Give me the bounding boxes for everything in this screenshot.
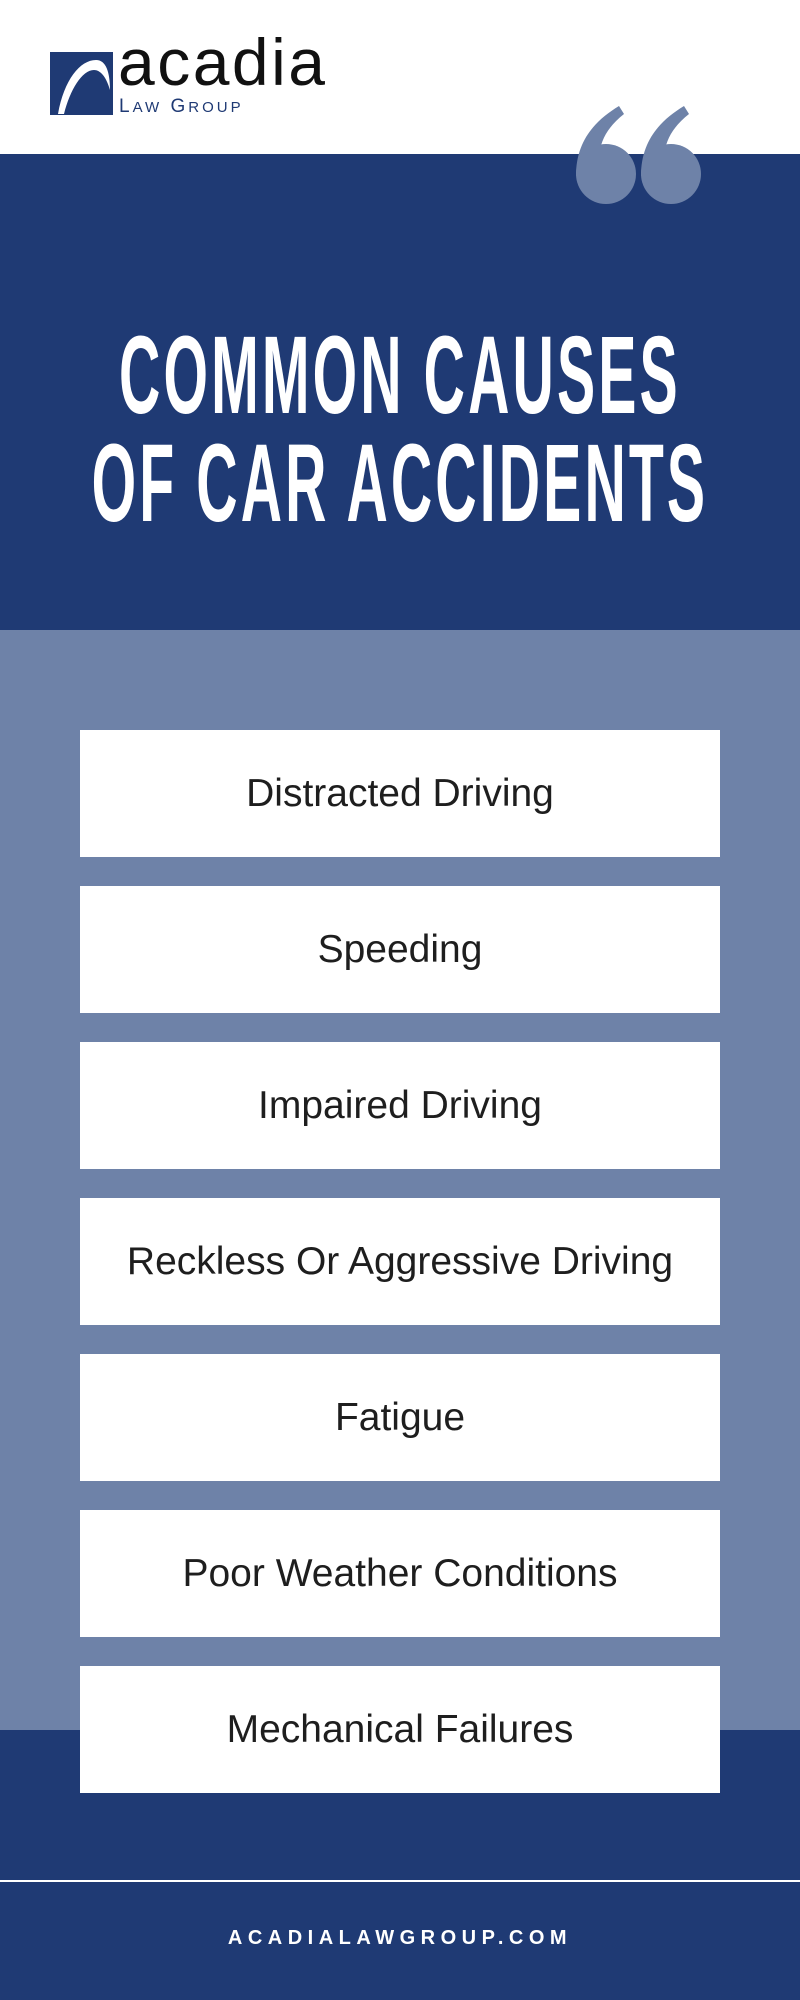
title: COMMON CAUSES [119,314,681,437]
list item: Fatigue [80,1354,720,1481]
logo: LAW GROUP [119,96,244,117]
icon: quote mark [576,106,701,204]
list item: Fatigue: Fatigue [335,1396,465,1438]
list item: Mechanical Failures: Mechanical Failures [227,1708,573,1750]
list item: Distracted Driving: Distracted Driving [246,772,554,814]
logo [50,25,328,117]
list item: Distracted Driving [80,730,720,857]
list item: Poor Weather: Poor Weather Conditions [182,1552,618,1594]
list item: Speeding [80,886,720,1013]
list item: Reckless: Reckless Or Aggressive Driving [127,1240,673,1282]
list item: Mechanical Failures [80,1666,720,1793]
title: OF CAR ACCIDENTS [92,422,708,545]
list item: Impaired Driving: Impaired Driving [258,1084,542,1126]
panel: light blue list background [0,630,800,1730]
list item: Impaired Driving [80,1042,720,1169]
footer url: ACADIALAWGROUP.COM [228,1927,572,1949]
list item: Reckless [80,1198,720,1325]
panel: dark blue footer band [0,1730,800,2000]
list item: Speeding: Speeding [318,928,482,970]
panel: dark blue header band [0,154,800,630]
title [92,314,708,545]
list item: Poor Weather [80,1510,720,1637]
logo: acadia [118,25,328,99]
